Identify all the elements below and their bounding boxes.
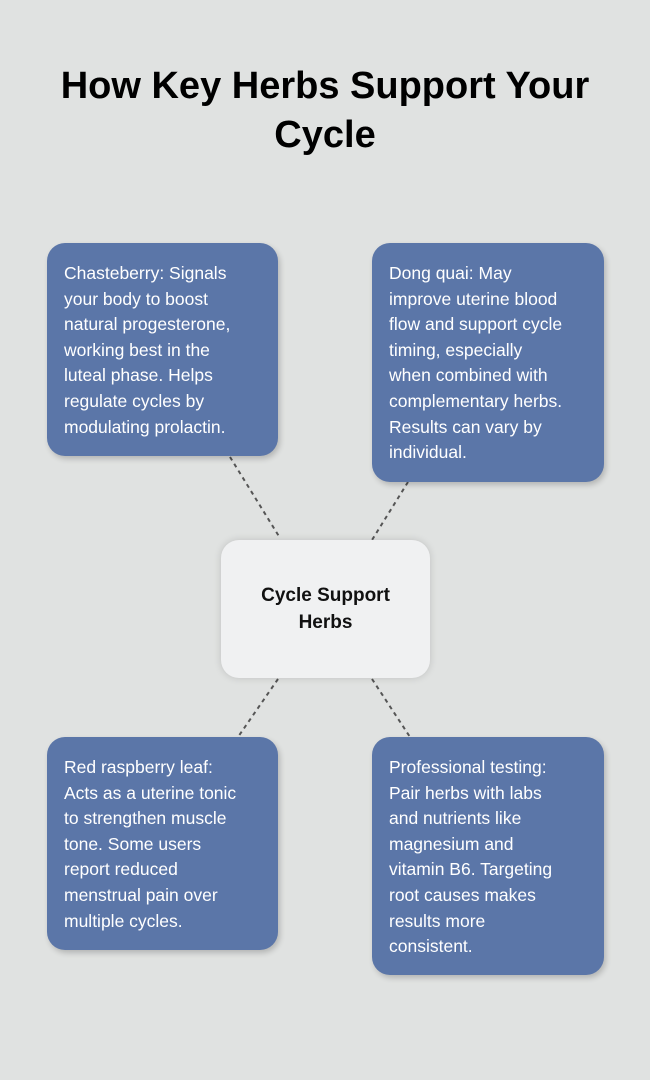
panel: red raspberry leaf: tone. Some users	[64, 834, 201, 854]
panel: professional testing: Professional testing:	[389, 757, 547, 777]
panel: professional testing: magnesium and	[389, 834, 514, 854]
panel: chasteberry: Chasteberry: Signals	[64, 263, 226, 283]
panel: dong quai: timing, especially	[389, 340, 522, 360]
panel: chasteberry: natural progesterone,	[64, 314, 230, 334]
panel: chasteberry	[47, 243, 278, 456]
panel: dong quai	[372, 243, 604, 482]
panel: dong quai: individual.	[389, 442, 467, 462]
panel: dong quai: Dong quai: May	[389, 263, 512, 283]
panel: professional testing: and nutrients like	[389, 808, 521, 828]
panel: dong quai: complementary herbs.	[389, 391, 562, 411]
panel: red raspberry leaf: multiple cycles.	[64, 911, 183, 931]
center node	[221, 540, 430, 678]
panel: professional testing: vitamin B6. Targeting	[389, 859, 552, 879]
panel: red raspberry leaf: to strengthen muscle	[64, 808, 226, 828]
center node: Herbs	[299, 612, 352, 633]
panel: chasteberry: your body to boost	[64, 289, 208, 309]
panel: red raspberry leaf: Red raspberry leaf:	[64, 757, 213, 777]
panel: dong quai: Results can vary by	[389, 417, 542, 437]
title: Cycle	[274, 114, 376, 156]
panel: professional testing	[372, 737, 604, 975]
panel: chasteberry: working best in the	[64, 340, 210, 360]
panel: dong quai: flow and support cycle	[389, 314, 562, 334]
title	[61, 65, 589, 156]
panel: dong quai: when combined with	[389, 365, 548, 385]
panel: red raspberry leaf: Acts as a uterine tonic	[64, 783, 236, 803]
title: How Key Herbs Support Your	[61, 65, 589, 107]
panel: chasteberry: modulating prolactin.	[64, 417, 225, 437]
panel: chasteberry: luteal phase. Helps	[64, 365, 213, 385]
panel: chasteberry: regulate cycles by	[64, 391, 204, 411]
panel: professional testing: results more	[389, 911, 485, 931]
panel: professional testing: root causes makes	[389, 885, 536, 905]
center node: Cycle Support	[261, 585, 390, 606]
panel: red raspberry leaf: menstrual pain over	[64, 885, 218, 905]
panel: professional testing: consistent.	[389, 936, 473, 956]
panel: red raspberry leaf: report reduced	[64, 859, 178, 879]
panel: red raspberry leaf	[47, 737, 278, 950]
panel: professional testing: Pair herbs with labs	[389, 783, 542, 803]
panel: dong quai: improve uterine blood	[389, 289, 557, 309]
